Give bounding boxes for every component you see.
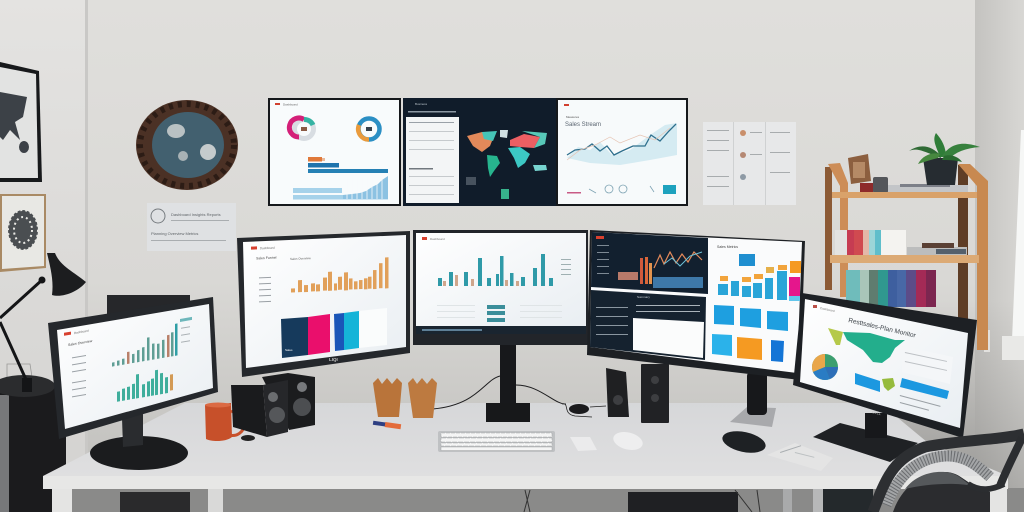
dark side cabinet (0, 364, 66, 512)
dark panel bars (618, 257, 703, 288)
line chart (567, 123, 677, 165)
data table (437, 305, 562, 322)
desk lamp (0, 253, 86, 392)
box behind monitor (107, 295, 190, 315)
wall art: pattern frame (0, 194, 46, 272)
wall monitor: world map dashboard (403, 98, 556, 206)
donut chart right (358, 118, 380, 140)
wall monitor: donut dashboard (268, 98, 401, 206)
keyboard (438, 431, 555, 452)
world map (467, 130, 547, 177)
legend (180, 317, 192, 343)
legend (561, 259, 571, 275)
desk cups (373, 378, 437, 418)
wall note card (147, 203, 236, 251)
under desk area (66, 488, 1024, 512)
desk (43, 403, 1008, 512)
horizontal bars (293, 157, 388, 200)
screen header (64, 328, 93, 399)
screen header (813, 305, 835, 313)
monitor: teal bar dashboard (413, 230, 588, 422)
mug (205, 402, 255, 441)
blue banner (900, 378, 949, 399)
screen header: Dashboard (74, 329, 89, 335)
dashboard heading: Resttsales-Plan Monitor (848, 317, 917, 340)
colour cards (281, 308, 387, 358)
trackpad (570, 437, 597, 451)
marker (373, 421, 401, 429)
wall monitor: line chart dashboard (556, 98, 688, 206)
secondary orange bars (443, 275, 519, 286)
brand label: DELL (872, 410, 881, 416)
wall plate: round globe (136, 100, 238, 190)
screen header: Sales Overview (290, 256, 312, 261)
wall art: world map frame (0, 62, 42, 182)
wall monitor: donut dashboard: Dashboard (283, 102, 298, 106)
bar chart lower (117, 367, 173, 402)
wall note card: Dashboard Insights Reports (171, 212, 221, 217)
monitor: multi-panel dashboard (587, 230, 805, 380)
wall pinned reports (703, 122, 796, 205)
rising bar series (343, 176, 388, 199)
dark chart panel (591, 232, 708, 294)
left monitor stand and base (90, 414, 188, 470)
dark table panel: Summary (637, 295, 650, 299)
blue KPI card (855, 373, 880, 392)
stacked bars: Sales Metrics (717, 245, 738, 249)
bar chart upper (112, 323, 178, 367)
binders lower row (846, 270, 936, 307)
office chair (873, 434, 1024, 512)
donut chart left (289, 118, 314, 138)
monitor stand silver (730, 372, 776, 427)
black mouse (720, 428, 768, 456)
desk speakers (606, 364, 669, 423)
paper note (767, 443, 833, 471)
white mouse (611, 429, 645, 453)
small icons row (589, 185, 654, 193)
caption lines (900, 395, 941, 411)
screen header: Sales Overview (68, 339, 93, 347)
top shelf objects (848, 154, 968, 193)
screen header: Dashboard (820, 306, 835, 313)
monitor: orange bar dashboard (237, 231, 410, 377)
KPI cards (712, 305, 788, 362)
stacked bars (717, 245, 801, 301)
bookshelf (825, 133, 988, 350)
bar chart orange (291, 257, 388, 293)
monitor: map and pie dashboard (793, 293, 977, 462)
pie chart (812, 354, 838, 380)
wall monitor: world map dashboard: Business (415, 102, 428, 106)
left monitor (48, 297, 218, 439)
wall monitor: line chart dashboard: Measures (566, 115, 580, 119)
monitor brand label: LIQI (329, 357, 338, 362)
wall note card: Planning Overview Metrics (151, 231, 198, 236)
green map (828, 328, 905, 391)
small black device (562, 404, 606, 417)
binders upper row (835, 230, 906, 256)
wall monitor: line chart dashboard: Sales Stream (565, 122, 601, 128)
dark table panel (590, 290, 706, 360)
screen header (422, 237, 445, 241)
info panel with lines (902, 346, 953, 384)
teal bar chart (438, 254, 553, 286)
colour cards: Sales (285, 348, 293, 352)
potted plant (909, 133, 980, 185)
screen header: Dashboard (260, 246, 275, 250)
stereo speakers (231, 373, 315, 437)
screen header: Dashboard (430, 237, 445, 241)
screen header (251, 244, 312, 303)
screen header: Sales Funnel (256, 256, 277, 260)
stacked magazines (907, 243, 967, 255)
